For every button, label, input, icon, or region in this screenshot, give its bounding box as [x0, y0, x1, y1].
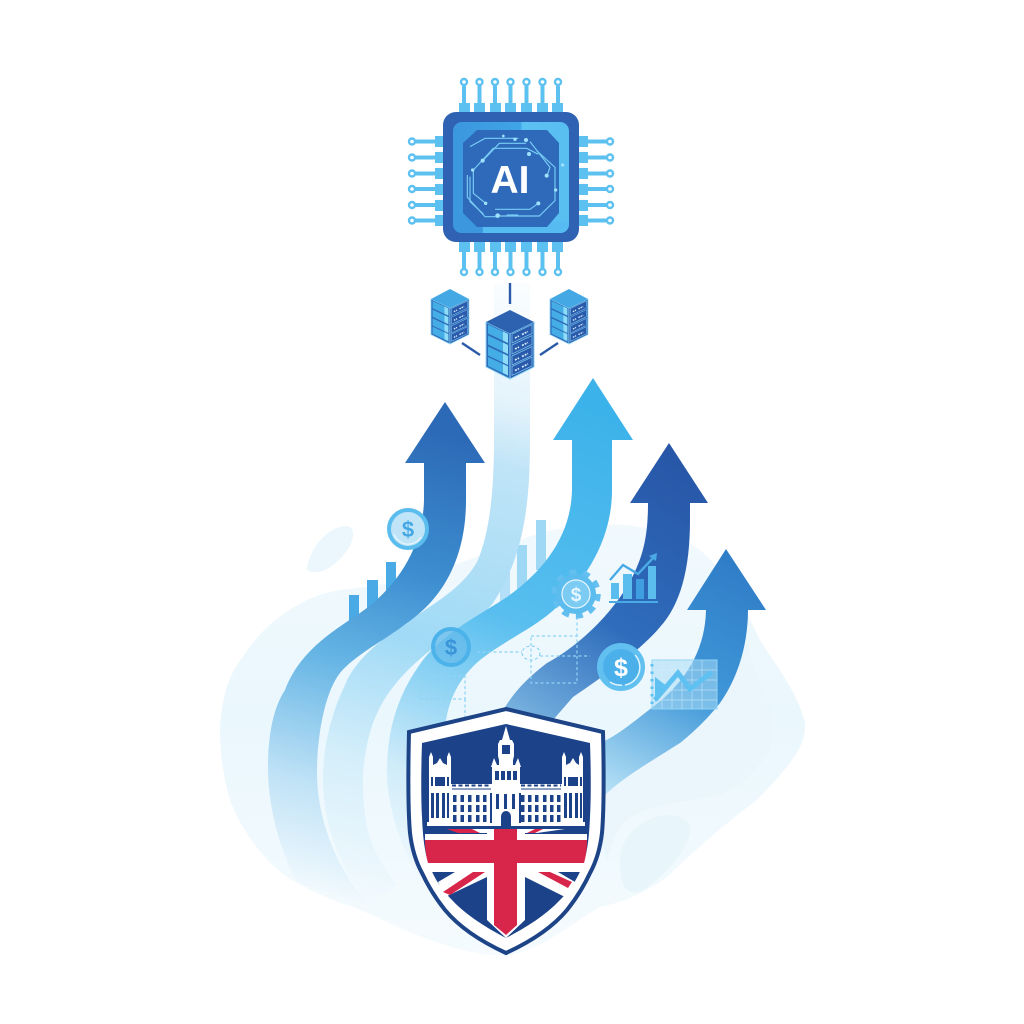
- coin: top left: [389, 510, 427, 548]
- icon: gear coin: $: [571, 585, 582, 606]
- coin: top left: $: [402, 517, 414, 542]
- icon: AI chip: [409, 79, 613, 275]
- bar chart: left: [349, 562, 396, 625]
- background blobs: [220, 524, 805, 955]
- chip label: AI: [490, 159, 530, 202]
- chip body: [443, 112, 579, 242]
- parliament building: [427, 726, 585, 826]
- icon: gear coin: [554, 572, 598, 616]
- chip traces: [467, 138, 555, 217]
- union flag: [425, 829, 587, 938]
- icon: UK shield: [408, 709, 604, 953]
- coin: right: [600, 646, 642, 688]
- server stream link lines: [462, 283, 558, 355]
- arrow: sky blue: [387, 378, 633, 900]
- coin: right: $: [614, 654, 628, 682]
- chip pins: [415, 86, 607, 269]
- arrow: right blue: [596, 549, 766, 797]
- icon: growth bar chart: [609, 553, 658, 603]
- arrow: light central stream from server: [323, 283, 530, 903]
- arrow: dark blue: [495, 443, 708, 725]
- icon: server right: [550, 289, 588, 344]
- coin: centre: $: [445, 635, 457, 660]
- shield navy field: [421, 724, 591, 938]
- icon: server centre: [486, 310, 534, 379]
- chip pin terminals: [409, 79, 613, 275]
- icon: server left: [431, 289, 469, 344]
- dashed process boxes: [420, 617, 590, 720]
- arrow: left blue: [268, 402, 485, 903]
- icon: line chart panel: [652, 660, 717, 709]
- coin: centre: [433, 629, 469, 665]
- bar chart: centre: [500, 520, 546, 607]
